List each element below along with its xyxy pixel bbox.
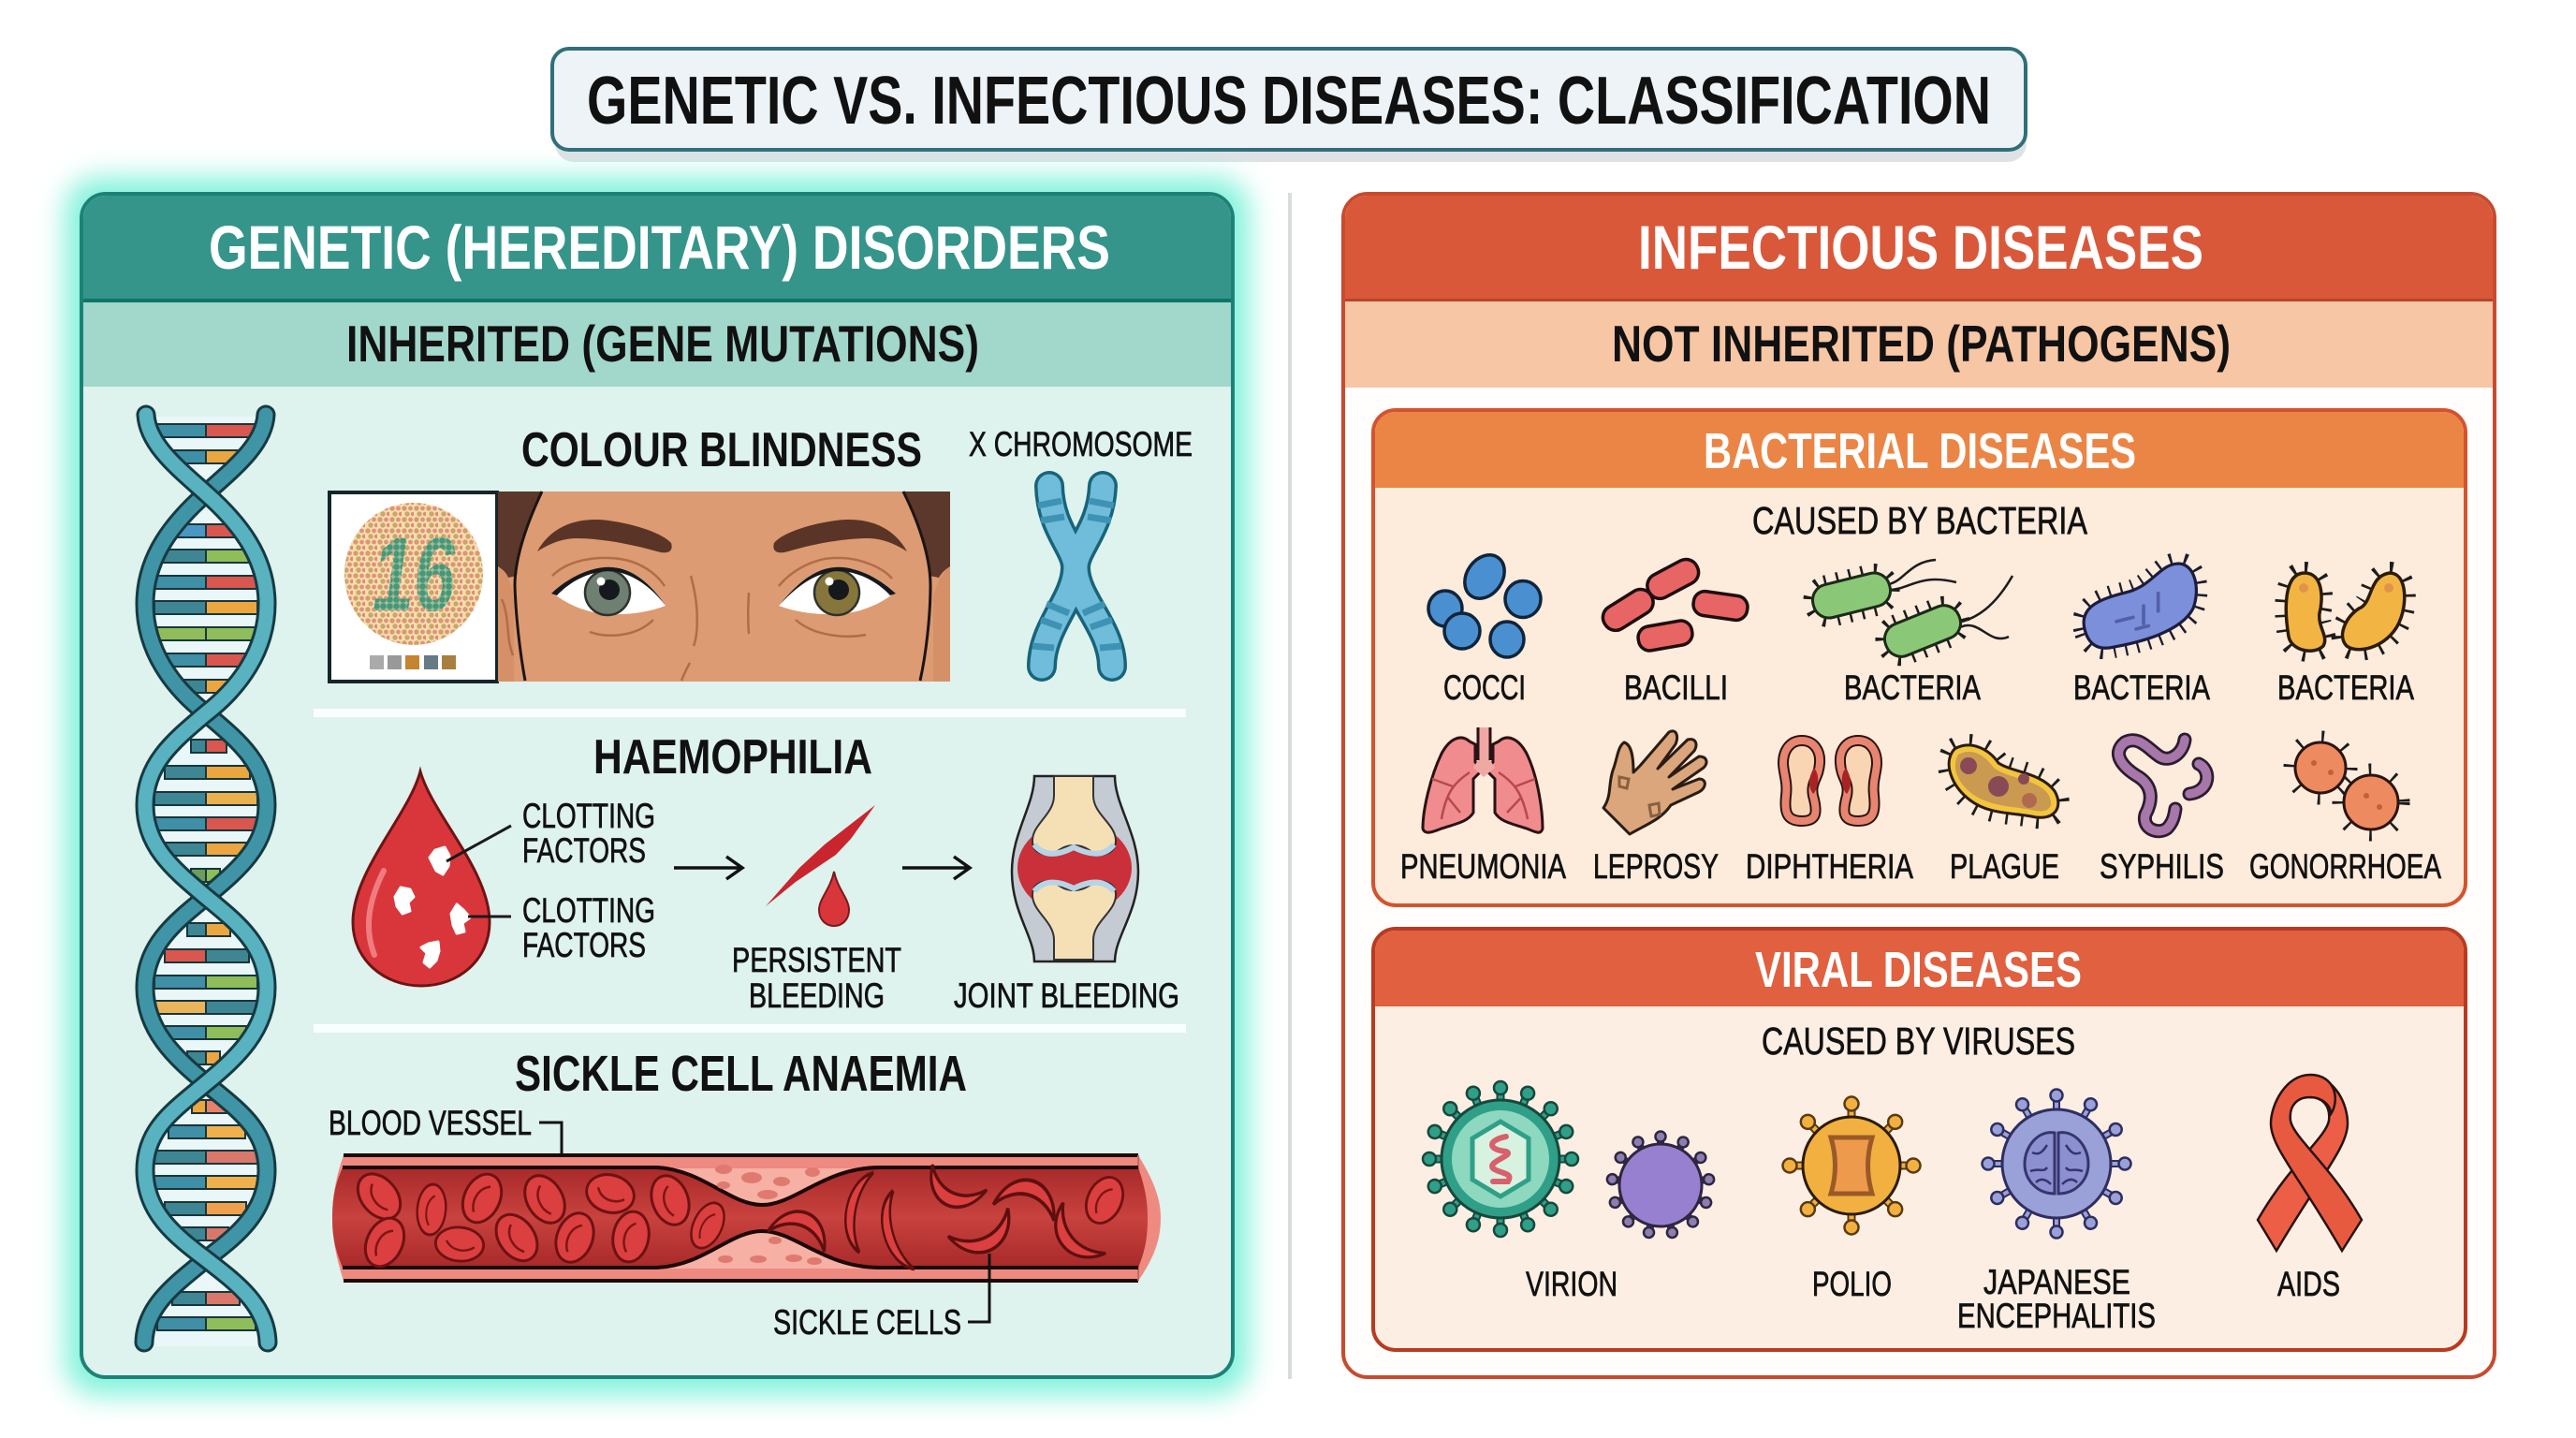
panel: genetic disorders <box>66 178 1249 1395</box>
callout line: blood vessel <box>539 1123 562 1162</box>
label: blood vessel: BLOOD VESSEL <box>329 1104 532 1142</box>
icon: bacilli <box>1599 555 1749 653</box>
centre divider <box>1288 193 1292 1379</box>
arrow: to persistent bleeding <box>674 857 742 879</box>
label: bacteria 1: BACTERIA <box>1844 668 1981 707</box>
label: polio: POLIO <box>1812 1265 1892 1303</box>
label: japanese encephalitis: JAPANESE <box>1983 1263 2130 1301</box>
label: joint bleeding: JOINT BLEEDING <box>954 976 1179 1015</box>
icon: blood vessel with sickle cells <box>332 1155 1161 1281</box>
section divider <box>314 1024 1186 1033</box>
callout line: sickle cells <box>968 1254 989 1322</box>
icon: purple bacterium <box>2074 560 2206 653</box>
label: aids: AIDS <box>2277 1265 2340 1303</box>
icon: virion pair <box>1423 1081 1715 1239</box>
panel: viral diseases <box>1373 929 2466 1350</box>
label: virion: VIRION <box>1526 1265 1617 1303</box>
label: bacilli: BACILLI <box>1624 668 1728 707</box>
genetic panel header <box>83 196 1231 302</box>
label: persistent bleeding: BLEEDING <box>749 976 885 1015</box>
label: gonorrhoea: GONORRHOEA <box>2249 847 2441 886</box>
label: pneumonia: PNEUMONIA <box>1400 847 1566 886</box>
label: japanese encephalitis: ENCEPHALITIS <box>1957 1297 2156 1335</box>
genetic panel subheader <box>83 302 1231 387</box>
label: japanese encephalitis <box>1957 1263 2156 1335</box>
icon: curved orange bacteria <box>2286 573 2405 651</box>
bacterial header: BACTERIAL DISEASES <box>1704 423 2136 479</box>
icon: ishihara test card <box>329 492 497 682</box>
icon: aids ribbon <box>2258 1075 2362 1251</box>
icon: gonorrhoea cocci <box>2291 739 2402 833</box>
label: clotting factors top <box>522 797 655 870</box>
icon: cut with blood drop <box>766 805 875 926</box>
heading: sickle cell anaemia: SICKLE CELL ANAEMIA <box>515 1046 967 1102</box>
label: syphilis: SYPHILIS <box>2100 847 2224 886</box>
viral header <box>1375 931 2464 1006</box>
icon: polio virus <box>1782 1097 1921 1234</box>
viral header: VIRAL DISEASES <box>1755 942 2082 998</box>
icon: lungs <box>1423 727 1543 832</box>
infectious panel subheader: NOT INHERITED (PATHOGENS) <box>1612 315 2231 373</box>
icon: japanese encephalitis virus <box>1983 1090 2130 1238</box>
arrow: to joint bleeding <box>902 857 970 879</box>
icon: x chromosome <box>1032 486 1121 667</box>
icon: knee joint with bleeding <box>1012 776 1138 961</box>
icon: hand with lesions <box>1603 731 1706 834</box>
icon: diphtheria bacteria <box>1783 741 1877 821</box>
bacterial header <box>1375 412 2464 488</box>
icon: human eyes illustration <box>498 492 950 682</box>
label: clotting factors bottom: CLOTTING <box>522 891 655 930</box>
title: GENETIC VS. INFECTIOUS DISEASES: CLASSIFICATION <box>587 64 1991 139</box>
label: x chromosome: X CHROMOSOME <box>969 425 1193 463</box>
genetic panel header: GENETIC (HEREDITARY) DISORDERS <box>209 213 1110 282</box>
label: clotting factors top: FACTORS <box>522 831 646 870</box>
infectious panel header <box>1345 196 2493 301</box>
label: clotting factors top: CLOTTING <box>522 797 655 835</box>
label: diphtheria: DIPHTHERIA <box>1746 847 1913 886</box>
icon: cocci <box>1428 548 1541 657</box>
label: persistent bleeding <box>732 941 901 1015</box>
icon: ishihara test card: 16 <box>373 516 456 633</box>
icon: plague bacterium <box>1949 745 2058 817</box>
genetic panel subheader: INHERITED (GENE MUTATIONS) <box>346 315 979 373</box>
infectious panel subheader <box>1345 301 2493 388</box>
viral subtitle: CAUSED BY VIRUSES <box>1762 1020 2075 1063</box>
label: clotting factors bottom <box>522 891 655 964</box>
label: plague: PLAGUE <box>1950 847 2059 886</box>
label: bacteria 2: BACTERIA <box>2073 668 2210 707</box>
title <box>552 49 2027 162</box>
label: sickle cells: SICKLE CELLS <box>773 1303 961 1342</box>
icon: syphilis spirochete <box>2118 740 2207 831</box>
panel: bacterial diseases <box>1373 410 2466 905</box>
infectious panel header: INFECTIOUS DISEASES <box>1638 213 2203 282</box>
panel: infectious diseases <box>1343 194 2495 1377</box>
icon: dna double helix <box>144 415 268 1346</box>
label: cocci: COCCI <box>1443 668 1526 707</box>
icon: flagellated green bacteria <box>1809 560 2012 661</box>
label: leprosy: LEPROSY <box>1593 847 1719 886</box>
section divider <box>314 709 1186 717</box>
heading: colour blindness: COLOUR BLINDNESS <box>521 423 922 477</box>
label: persistent bleeding: PERSISTENT <box>732 941 901 979</box>
bacterial subtitle: CAUSED BY BACTERIA <box>1752 499 2088 542</box>
label: bacteria 3: BACTERIA <box>2277 668 2414 707</box>
label: clotting factors bottom: FACTORS <box>522 926 646 964</box>
icon: blood drop with clotting factors <box>353 771 511 986</box>
heading: haemophilia: HAEMOPHILIA <box>593 730 872 785</box>
